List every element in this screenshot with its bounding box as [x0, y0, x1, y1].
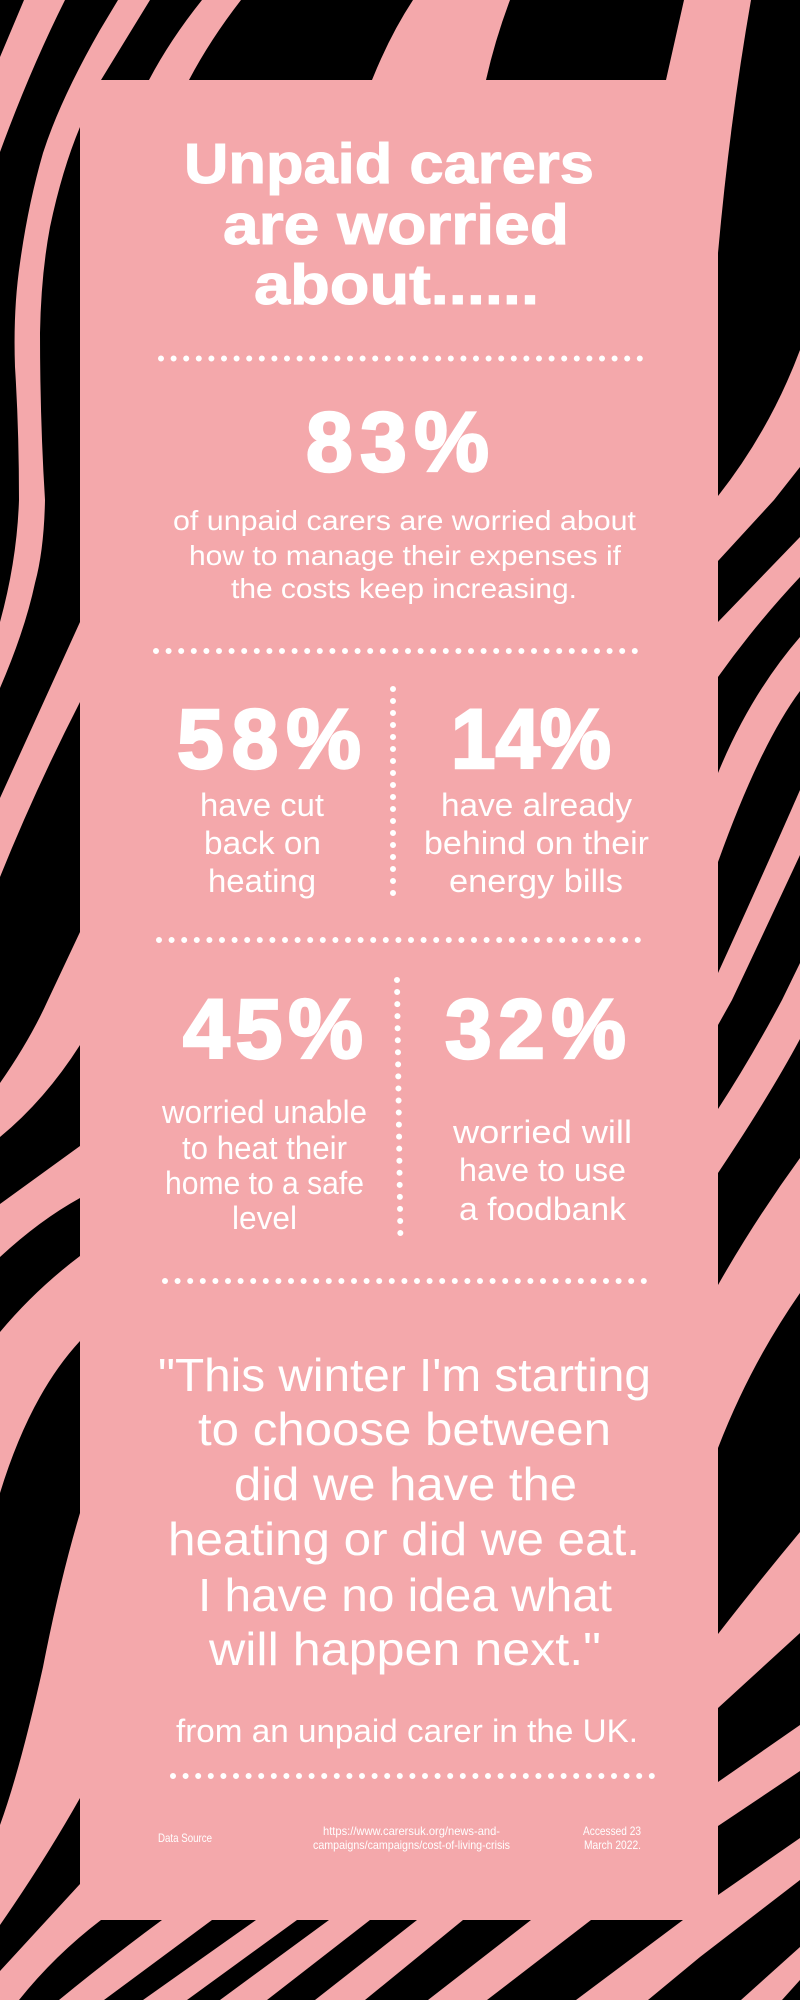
top black stripes — [101, 0, 684, 80]
quote: "This winter I'm starting — [158, 1349, 651, 1401]
stat: 83%: of unpaid carers are worried about — [173, 505, 636, 536]
bottom black stripes — [19, 1920, 683, 2000]
title: are worried — [223, 193, 569, 257]
title: about...... — [254, 253, 539, 317]
quote: heating or did we eat. — [168, 1513, 640, 1565]
quote: I have no idea what — [198, 1569, 612, 1621]
stat: 58%: 58% — [177, 692, 361, 786]
access date: Accessed 23 — [583, 1824, 641, 1838]
access date: March 2022. — [584, 1838, 641, 1852]
stat: 45%: home to a safe — [165, 1165, 364, 1201]
stat: 58%: back on — [204, 825, 321, 861]
quote: will happen next." — [208, 1623, 601, 1675]
stat: 58% — [177, 692, 361, 899]
stat: 32%: 32% — [445, 982, 626, 1076]
stat: 58%: heating — [208, 863, 316, 899]
data source url — [313, 1824, 510, 1852]
stat: 58%: have cut — [200, 787, 324, 823]
title: Unpaid carers — [184, 132, 594, 196]
stat: 32% — [445, 982, 632, 1227]
quote: did we have the — [234, 1458, 577, 1510]
stat: 32%: have to use — [459, 1152, 626, 1188]
data source url: https://www.carersuk.org/news-and- — [323, 1824, 500, 1838]
stat: 45% — [161, 982, 367, 1236]
stat: 32%: a foodbank — [459, 1191, 627, 1227]
stat: 83%: how to manage their expenses if — [189, 540, 621, 571]
stat: 45%: worried unable — [161, 1094, 367, 1130]
stat: 32%: worried will — [452, 1114, 632, 1150]
stat: 45%: to heat their — [182, 1130, 347, 1166]
quote attribution: from an unpaid carer in the UK. — [176, 1713, 638, 1749]
stat: 14% — [424, 692, 649, 899]
data source url: campaigns/campaigns/cost-of-living-crisis — [313, 1838, 510, 1852]
stat: 45%: 45% — [183, 982, 363, 1076]
access date — [583, 1824, 641, 1852]
quote: to choose between — [198, 1403, 611, 1455]
stat: 14%: behind on their — [424, 825, 649, 861]
title — [184, 132, 594, 317]
stat: 83% — [173, 395, 636, 604]
stat: 14%: 14% — [451, 692, 611, 786]
stat: 83%: 83% — [306, 395, 489, 489]
data source label: Data Source — [158, 1831, 212, 1845]
left black stripes — [0, 0, 118, 1971]
stat: 14%: have already — [441, 787, 632, 823]
right black stripes — [648, 0, 800, 2000]
stat: 14%: energy bills — [449, 863, 623, 899]
stat: 83%: the costs keep increasing. — [231, 573, 577, 604]
quote — [158, 1349, 651, 1675]
stat: 45%: level — [232, 1200, 297, 1236]
